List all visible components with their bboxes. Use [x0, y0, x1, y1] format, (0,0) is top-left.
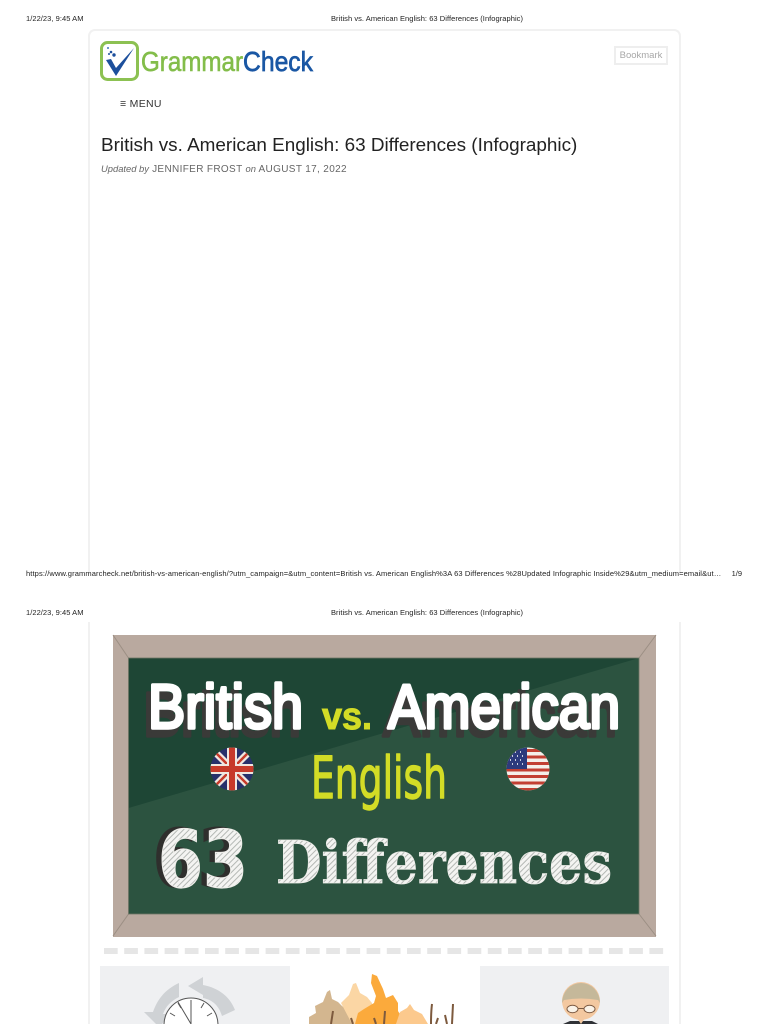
icon: US flag	[506, 747, 550, 791]
print header: page 1: 1/22/23, 9:45 AM	[26, 14, 84, 23]
icon: autumn trees	[309, 974, 453, 1024]
panel: clock	[100, 966, 290, 1024]
heading: 63: 63	[158, 816, 248, 906]
page card: infographic	[88, 622, 681, 1024]
heading: Differences: Differences	[276, 828, 612, 897]
heading: vs.: vs.	[322, 696, 372, 738]
byline: Updated by JENNIFER FROST on AUGUST 17, 2022	[101, 163, 347, 175]
heading: American: American	[383, 681, 617, 750]
icon: man with glasses	[562, 982, 600, 1024]
bookmark button: Bookmark	[620, 50, 662, 61]
icon: clock with cycle arrows	[144, 977, 235, 1024]
print header: page 2: 1/22/23, 9:45 AM	[26, 608, 84, 617]
print footer: page 1: 1/9	[732, 569, 742, 578]
heading: American: American	[388, 673, 620, 742]
chalkboard	[113, 635, 656, 937]
heading: British: British	[148, 673, 303, 742]
infographic artwork	[100, 634, 669, 1024]
logo: GrammarCheck	[100, 41, 314, 81]
heading: British: British	[143, 681, 301, 750]
print footer: page 1: https://www.grammarcheck.net/british-vs-american-english/?utm_campaign=&utm_content=British vs. American English%3A 63 Differences %28Updated Infographic Inside%29&utm_medium=email&ut…	[26, 569, 721, 578]
bookmark button	[614, 46, 668, 65]
panel: gentleman	[480, 966, 669, 1024]
heading: 63: 63	[153, 815, 243, 905]
wooden frame	[113, 635, 656, 937]
article title: British vs. American English: 63 Differences (Infographic)	[101, 135, 577, 156]
logo: GrammarCheck: Grammar	[141, 46, 243, 77]
page card: article header	[88, 29, 681, 574]
print header: page 1: British vs. American English: 63 Differences (Infographic)	[331, 14, 523, 23]
dashed divider	[104, 948, 664, 954]
menu: ≡ MENU	[120, 98, 162, 110]
print header: page 1	[26, 14, 523, 23]
icon: UK flag	[210, 747, 254, 791]
heading: English: English	[311, 744, 447, 812]
board surface	[128, 658, 639, 914]
print header: page 2: British vs. American English: 63 Differences (Infographic)	[331, 608, 523, 617]
print header: page 2	[26, 608, 523, 617]
